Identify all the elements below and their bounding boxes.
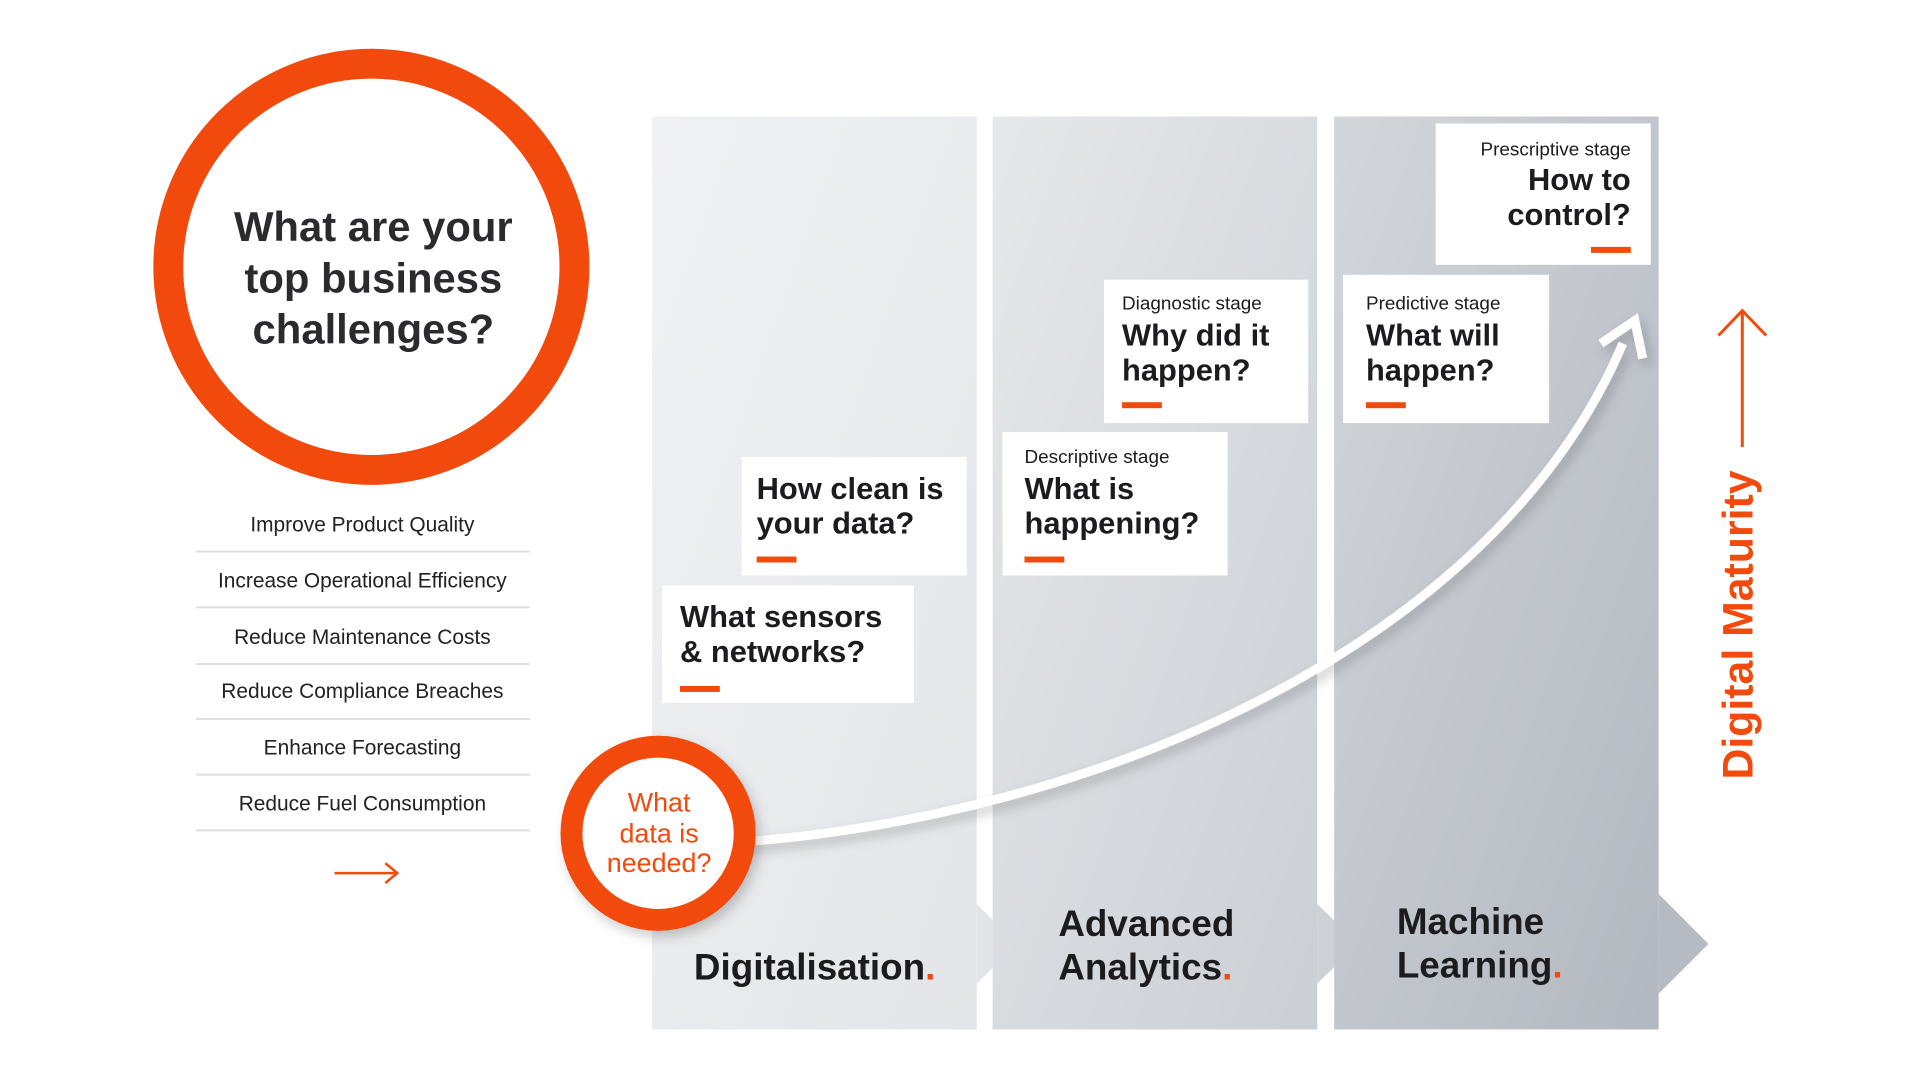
box: Prescriptive stage: Prescriptive stage — [1481, 139, 1631, 160]
growth curve arrow — [737, 321, 1643, 842]
label: Digitalisation: Digitalisation. — [694, 947, 935, 988]
box: Predictive stage — [1343, 275, 1549, 423]
box: What sensors & networks: What sensors — [680, 599, 882, 634]
box: Prescriptive stage — [1436, 123, 1651, 265]
arrow: digital maturity up — [1718, 311, 1766, 447]
label: Machine Learning: Machine — [1397, 901, 1544, 942]
column: Machine Learning — [1334, 116, 1708, 1029]
column: Advanced Analytics — [993, 116, 1358, 1029]
small circle: What data is needed?: What — [628, 787, 691, 817]
label: Machine Learning — [1397, 901, 1563, 986]
box: Prescriptive stage: control? — [1507, 197, 1631, 232]
label: Advanced Analytics — [1058, 903, 1234, 988]
box: Descriptive stage: What is — [1024, 471, 1134, 506]
label: Machine Learning: Learning. — [1397, 945, 1563, 986]
box: Predictive stage: Predictive stage — [1366, 294, 1500, 315]
box: Descriptive stage — [1003, 432, 1228, 575]
box: Diagnostic stage: Diagnostic stage — [1122, 294, 1262, 315]
box: Descriptive stage: Descriptive stage — [1024, 447, 1169, 468]
challenges list: Reduce Fuel Consumption — [239, 792, 486, 815]
column: Digitalisation — [652, 116, 1018, 1029]
box: Diagnostic stage: happen? — [1122, 352, 1251, 387]
challenges list: Increase Operational Efficiency — [218, 569, 507, 592]
challenges list: Enhance Forecasting — [264, 737, 461, 760]
box: How clean is your data: your data? — [757, 506, 914, 541]
arrow: list to chart — [335, 863, 397, 883]
box: Diagnostic stage: Why did it — [1122, 317, 1269, 352]
challenges list — [196, 514, 530, 830]
box: Predictive stage: happen? — [1366, 352, 1495, 387]
box: How clean is your data — [742, 457, 967, 575]
box: Diagnostic stage — [1104, 280, 1308, 423]
main title circle: What are your — [234, 203, 513, 250]
box: Predictive stage: What will — [1366, 317, 1500, 352]
main title circle — [168, 64, 574, 470]
box: How clean is your data: How clean is — [757, 471, 944, 506]
label: Advanced Analytics: Advanced — [1058, 903, 1234, 944]
main title circle: top business — [244, 255, 502, 302]
small circle: What data is needed?: needed? — [607, 848, 711, 878]
challenges list: Improve Product Quality — [250, 514, 475, 537]
label: Advanced Analytics: Analytics. — [1058, 947, 1232, 988]
small circle: What data is needed? — [571, 747, 745, 920]
small circle: What data is needed?: data is — [619, 818, 699, 848]
box: What sensors & networks — [662, 585, 914, 703]
vertical label: Digital Maturity: Digital Maturity — [1714, 470, 1762, 780]
box: Prescriptive stage: How to — [1528, 162, 1631, 197]
challenges list: Reduce Compliance Breaches — [221, 680, 503, 703]
box: What sensors & networks: & networks? — [680, 634, 865, 669]
challenges list: Reduce Maintenance Costs — [234, 626, 491, 649]
box: Descriptive stage: happening? — [1024, 506, 1199, 541]
main title circle: challenges? — [253, 305, 494, 352]
